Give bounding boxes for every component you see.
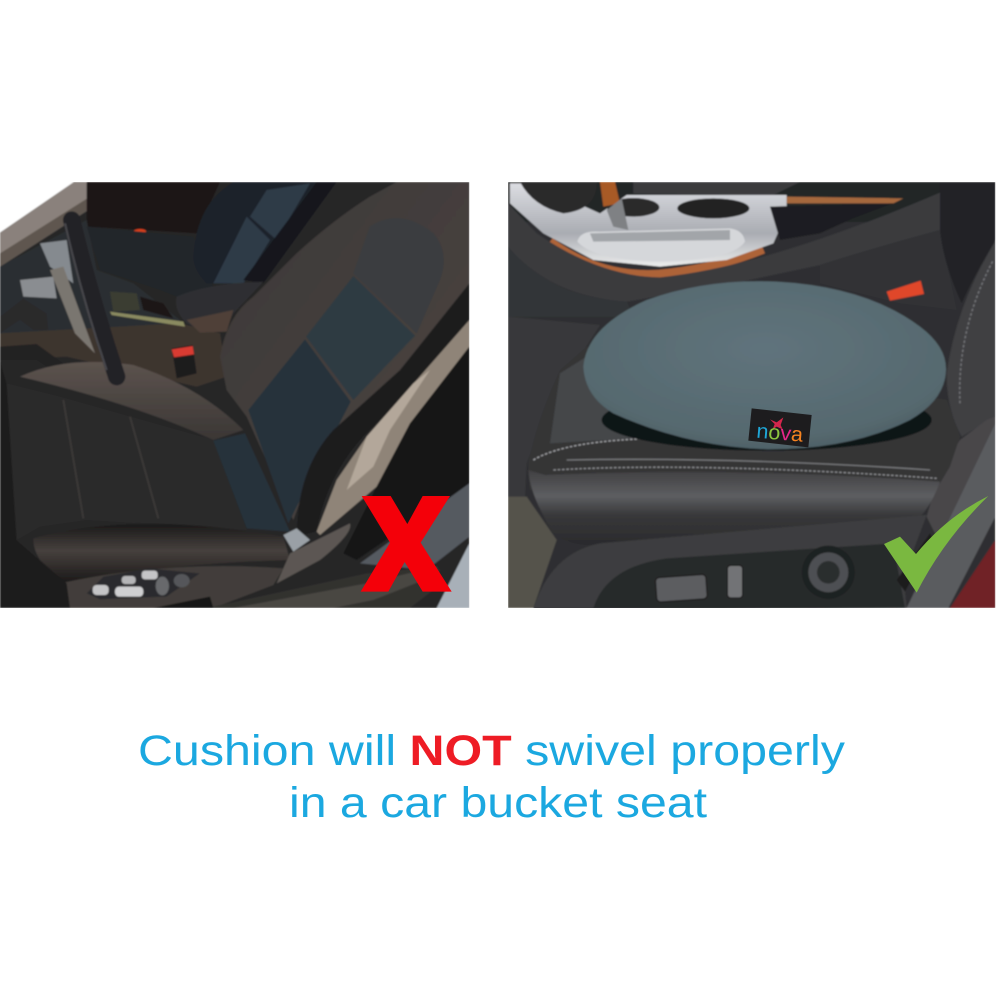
photo illustration: seat with swivel cushion [508,182,995,610]
caption text [138,727,846,827]
caption line 1: Cushion will NOT swivel properly [138,727,846,775]
icon: green check mark [884,496,988,593]
panel: swivel cushion on flat seat photo [508,182,995,610]
photo illustration: car bucket seat [0,182,469,608]
brand wordmark: nova [756,420,805,447]
panel: bucket seat photo [0,182,469,608]
icon: nova logo star [770,417,783,429]
caption line 2: in a car bucket seat [289,779,707,827]
cushion brand label [748,408,812,447]
infographic canvas [0,182,996,818]
icon: red X [361,496,452,592]
